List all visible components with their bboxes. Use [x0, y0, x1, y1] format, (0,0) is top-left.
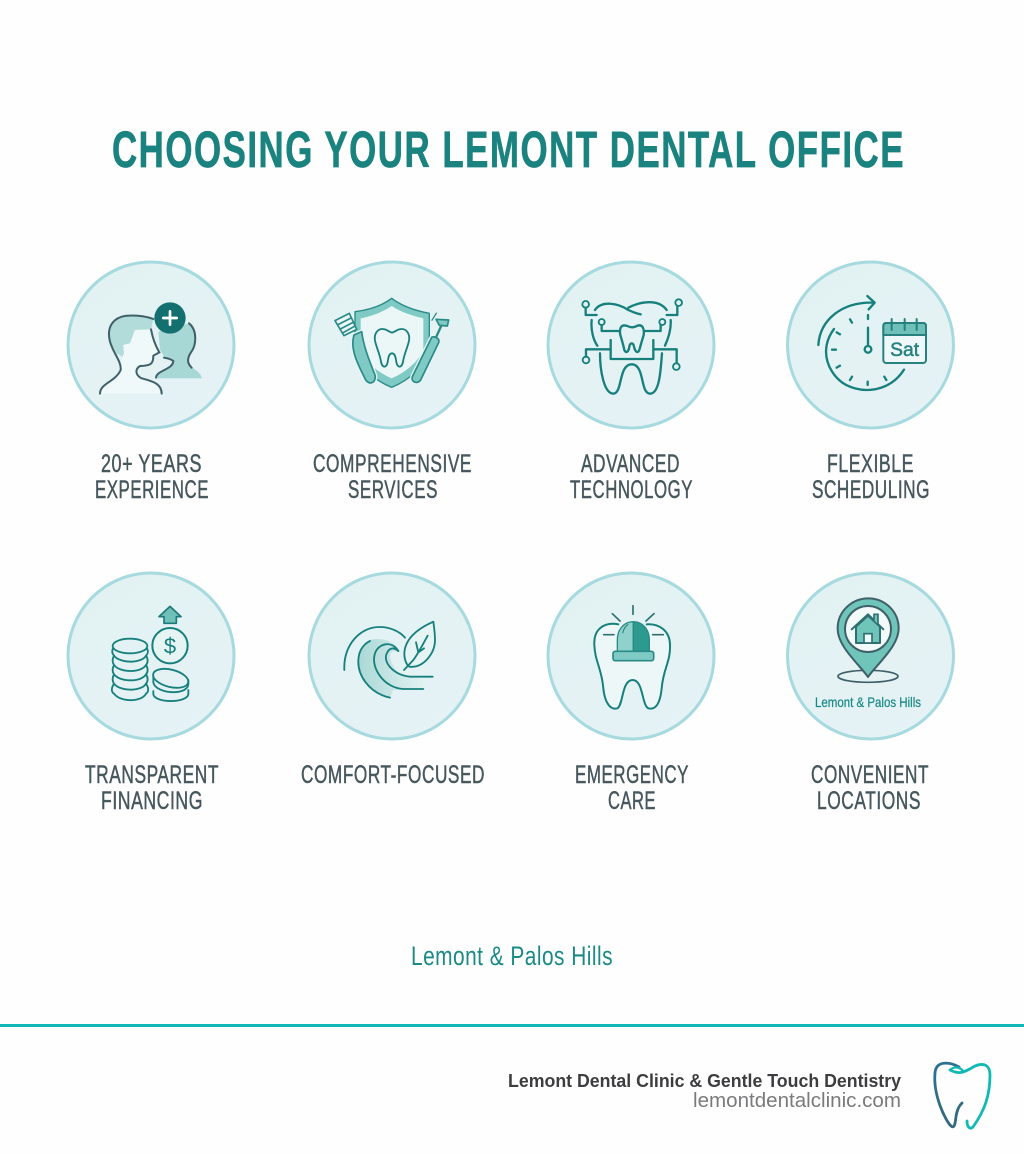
icon: tooth with circuit lines: [582, 299, 682, 394]
icon: wave and leaf: [344, 622, 435, 698]
icon: footer tooth logo: [935, 1063, 990, 1128]
label: [85, 761, 219, 815]
label: SERVICES: [348, 476, 438, 504]
icon: coin stacks and dollar coin: $: [164, 634, 176, 659]
label: [812, 450, 930, 504]
label: [95, 450, 209, 504]
panel: convenient locations: [788, 573, 954, 815]
icon: clock and Saturday calendar: [818, 296, 926, 390]
label: CARE: [608, 787, 656, 815]
icon: map pin with house: [838, 598, 899, 682]
icon: two people with plus: [100, 302, 202, 394]
footer: clinic name and website: Lemont Dental Clinic & Gentle Touch Dentistry: [508, 1071, 901, 1091]
label: [575, 761, 689, 815]
badge circle: [309, 573, 475, 739]
label: FINANCING: [101, 787, 203, 815]
panel: flexible scheduling: [788, 262, 954, 504]
icon: coin stacks and dollar coin: [112, 606, 190, 701]
badge circle: [309, 262, 475, 428]
badge circle: [68, 262, 234, 428]
icon: clock and Saturday calendar: Sat: [890, 340, 920, 361]
panel: 20+ years experience: [68, 262, 234, 504]
label: CONVENIENT: [811, 761, 929, 789]
icon: shield, tooth, brush and tool: [335, 298, 449, 387]
pin caption: Lemont & Palos Hills: [815, 694, 921, 710]
panel: advanced technology: [548, 262, 714, 504]
dental tool: [412, 337, 439, 382]
badge circle: [788, 262, 954, 428]
badge circle: [548, 262, 714, 428]
label: 20+ YEARS: [101, 450, 202, 478]
panel: transparent financing: [68, 573, 234, 815]
label: SCHEDULING: [812, 476, 930, 504]
badge circle: [788, 573, 954, 739]
badge circle: [548, 573, 714, 739]
footer: clinic name and website: lemontdentalclinic.com: [693, 1089, 901, 1112]
label: LOCATIONS: [817, 787, 921, 815]
label: [811, 761, 929, 815]
subtitle: locations: Lemont & Palos Hills: [411, 941, 613, 971]
label: [313, 450, 472, 504]
panel: comfort-focused: [301, 573, 485, 789]
label: FLEXIBLE: [827, 450, 914, 478]
label: EMERGENCY: [575, 761, 689, 789]
icon: tooth with siren: [594, 606, 670, 709]
label: COMFORT-FOCUSED: [301, 761, 485, 789]
label: ADVANCED: [581, 450, 680, 478]
label: EXPERIENCE: [95, 476, 209, 504]
toothbrush: [353, 332, 375, 383]
label: TRANSPARENT: [85, 761, 219, 789]
panel: comprehensive services: [309, 262, 475, 504]
badge circle: [68, 573, 234, 739]
panel: emergency care: [548, 573, 714, 815]
label: TECHNOLOGY: [570, 476, 693, 504]
label: [570, 450, 693, 504]
footer: clinic name and website: [508, 1071, 901, 1112]
label: COMPREHENSIVE: [313, 450, 472, 478]
footer rule: [0, 1024, 1024, 1027]
